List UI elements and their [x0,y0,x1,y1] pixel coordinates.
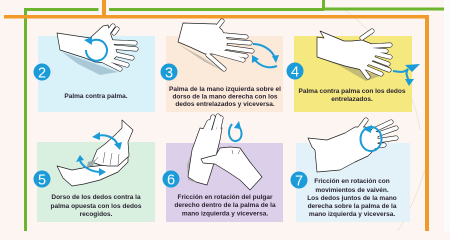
caption: mano izquierda y viceversa. [182,210,268,218]
number badge 3: 3 [165,66,173,82]
caption: Dorso de los dedos contra la [51,194,141,201]
panel: step 7 [290,120,410,222]
number badge 2: 2 [38,66,46,82]
arrows: back and forth [252,44,279,67]
caption: mano izquierda y viceversa. [309,211,395,218]
number badge 6: 6 [167,172,175,188]
caption: Fricción en rotación del pulgar [178,194,273,201]
caption: Fricción en rotación con [314,178,390,185]
arrows: three-way [393,64,420,86]
caption: movimientos de vaivén. [315,187,389,194]
hand: fingertips on palm [308,120,396,172]
caption: entrelazados. [331,96,373,103]
caption: Palma contra palma con los dedos [299,88,406,95]
caption: dorso de la mano derecha con los [172,94,278,100]
caption: recogidos. [80,211,113,218]
caption: dedos entrelazados y viceversa. [175,101,275,108]
arrow: rotation [84,37,107,61]
hands: thumb rotation [187,116,262,190]
caption: derecha sobre la palma de la [308,203,397,210]
hand: fingers interlaced [317,31,390,81]
arrow: rotation [229,121,242,141]
arrow: rotation [360,125,382,151]
caption: Palma contra palma. [64,93,128,100]
panel: step 6 [162,116,283,222]
arrows: up and down [76,132,122,176]
panel: step 4 [286,31,420,112]
caption [299,88,406,103]
caption [174,194,276,218]
hand: palm over back [178,21,252,72]
caption [307,178,397,218]
panel: step 2 [34,25,155,112]
panel: step 3 [160,21,283,112]
caption: Los dedos juntos de la mano [307,195,397,202]
hand: palm against palm [57,25,136,75]
panel: step 5 [34,120,155,222]
caption: derecho dentro de la palma de la [174,202,276,209]
caption [50,194,142,218]
number badge 7: 7 [295,174,303,190]
caption: palma opuesta con los dedos [50,203,142,210]
caption: Palma de la mano izquierda sobre el [169,86,281,93]
hand: fingers against palm [57,120,133,186]
number badge 4: 4 [291,64,299,80]
number badge 5: 5 [38,172,46,188]
caption [169,86,281,108]
